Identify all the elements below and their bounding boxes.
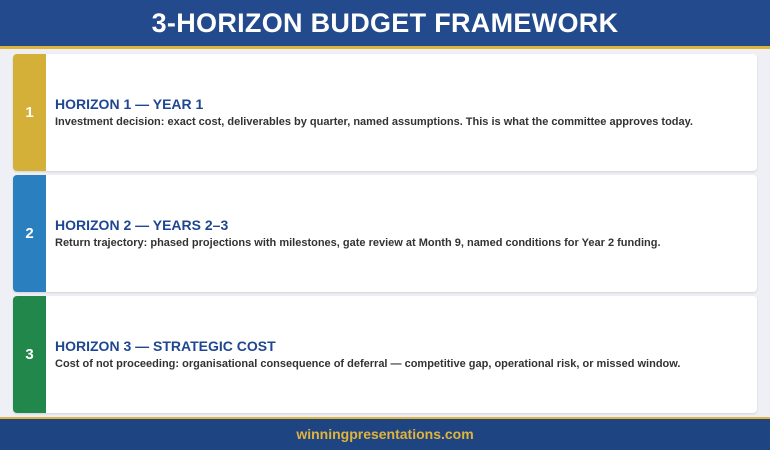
text: horizon 2: Return trajectory: phased projections with milestones, gate review at Month 9, named conditions for Year 2 funding. bbox=[55, 237, 661, 249]
title bbox=[0, 0, 770, 49]
panel: horizon 3 bbox=[13, 296, 757, 413]
title: 3-HORIZON BUDGET FRAMEWORK bbox=[152, 8, 618, 38]
text: horizon 2 bbox=[55, 217, 661, 249]
panel: horizon 1 bbox=[13, 54, 757, 171]
text: horizon 1 bbox=[55, 96, 693, 128]
number badge 2 bbox=[13, 175, 46, 292]
number badge 3 bbox=[13, 296, 46, 413]
text: horizon 1: HORIZON 1 — YEAR 1 bbox=[55, 96, 203, 112]
text: horizon 3: HORIZON 3 — STRATEGIC COST bbox=[55, 338, 276, 354]
text: horizon 2: HORIZON 2 — YEARS 2–3 bbox=[55, 217, 228, 233]
footer bbox=[0, 417, 770, 450]
number badge 1: 1 bbox=[25, 104, 34, 121]
text: horizon 3: Cost of not proceeding: organisational consequence of deferral — competitive gap, operational risk, or missed window. bbox=[55, 358, 680, 370]
number badge 2: 2 bbox=[25, 225, 34, 242]
number badge 3: 3 bbox=[25, 346, 34, 363]
panel: horizon 2 bbox=[13, 175, 757, 292]
number badge 1 bbox=[13, 54, 46, 171]
footer: winningpresentations.com bbox=[296, 426, 474, 442]
text: horizon 3 bbox=[55, 338, 680, 370]
text: horizon 1: Investment decision: exact cost, deliverables by quarter, named assumptions. This is what the committee approves today. bbox=[55, 116, 693, 128]
